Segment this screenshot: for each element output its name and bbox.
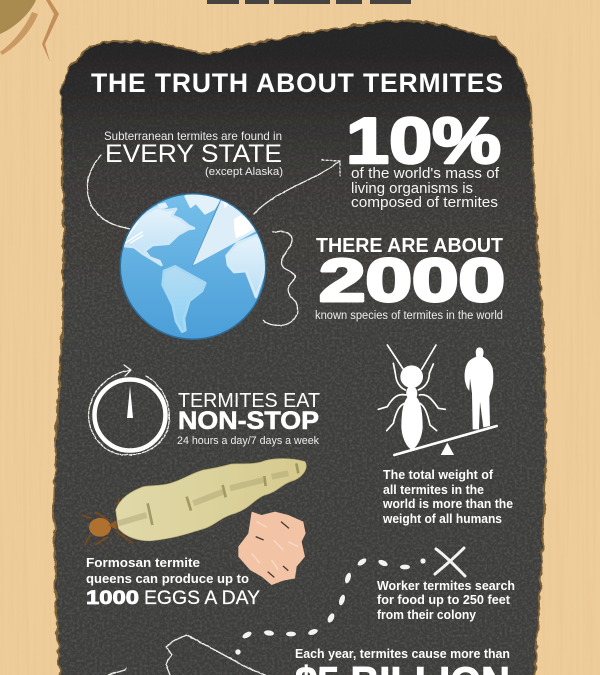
text block: worker termites	[377, 579, 515, 622]
text block: billion cost	[295, 646, 510, 675]
pie wedge	[192, 198, 223, 266]
south america	[163, 266, 205, 332]
north america	[121, 207, 194, 265]
text block: 10 percent: of the world's mass of	[351, 165, 500, 182]
illustration: termite queen	[82, 459, 306, 545]
text block: 10 percent	[346, 104, 501, 211]
text block: non-stop: TERMITES EAT	[178, 390, 320, 412]
heading fragment cut off at top	[207, 0, 411, 4]
chalk arrow: every state to globe	[87, 155, 130, 229]
chalk map outline	[108, 635, 265, 675]
text block: worker termites: Worker termites search	[377, 579, 515, 593]
text block: every state: Subterranean termites are found in	[104, 129, 282, 143]
text block: billion cost: Each year, termites cause more than	[295, 646, 510, 661]
text block: worker termites: from their colony	[377, 608, 476, 622]
text block: eggs a day	[86, 555, 260, 609]
text block: non-stop: NON-STOP	[178, 407, 319, 435]
human silhouette	[465, 347, 493, 429]
illustration: eggs	[238, 512, 306, 585]
text block: non-stop: 24 hours a day/7 days a week	[177, 435, 319, 447]
termite silhouette	[378, 345, 445, 449]
title: THE TRUTH ABOUT TERMITES	[91, 68, 503, 98]
text block: 10 percent: living organisms is	[351, 180, 473, 197]
text block: total weight: The total weight of	[383, 468, 494, 482]
text block: 2000 species: known species of termites in the world	[315, 310, 503, 322]
fulcrum	[441, 443, 454, 455]
text block: 10 percent: composed of termites	[351, 194, 498, 211]
text block: total weight: world is more than the	[382, 497, 513, 511]
text block: eggs a day: 1000	[86, 587, 139, 609]
text block: 2000 species: THERE ARE ABOUT	[316, 235, 503, 257]
text block: every state: (except Alaska)	[205, 166, 283, 178]
text block: every state	[104, 129, 283, 178]
alaska chalk scribble	[123, 222, 143, 244]
text block: total weight	[382, 468, 513, 526]
chalk arrow: globe to 10 percent	[254, 160, 340, 214]
text block: total weight: weight of all humans	[382, 512, 502, 526]
greenland and arctic	[185, 191, 222, 214]
text block: 10 percent: 10%	[346, 104, 501, 177]
text block: eggs a day: Formosan termite	[86, 555, 200, 570]
text block: every state: EVERY STATE	[105, 140, 282, 168]
africa	[227, 235, 268, 297]
termite illustration at top left corner	[0, 0, 59, 62]
chalk squiggle: globe to 2000	[263, 232, 298, 325]
icon: x marks the spot	[435, 548, 465, 576]
icon: clock	[89, 365, 169, 455]
text block: non-stop	[177, 390, 320, 447]
text block: eggs a day: queens can produce up to	[86, 571, 249, 586]
trail of dots	[235, 557, 426, 655]
text block: eggs a day: EGGS A DAY	[144, 587, 260, 609]
icon: termite and human on seesaw	[378, 345, 497, 455]
text block: worker termites: for food up to 250 feet	[377, 593, 511, 607]
text block: 2000 species	[315, 235, 505, 322]
seesaw plank	[394, 426, 497, 455]
text block: total weight: all termites in the	[383, 483, 484, 497]
text block: 2000 species: 2000	[319, 247, 505, 314]
icon: globe	[120, 191, 268, 340]
